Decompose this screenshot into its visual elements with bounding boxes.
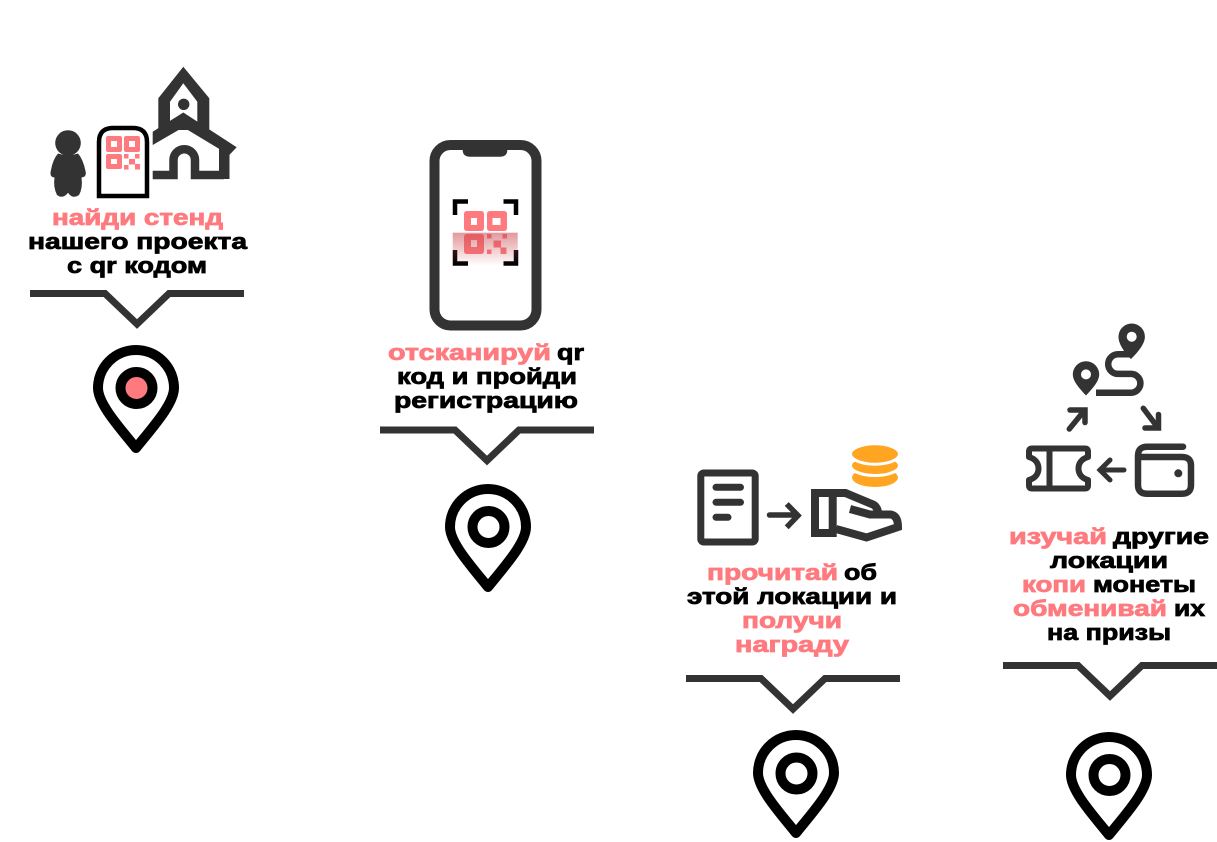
heading: step 1 text [28,205,248,278]
heading: step 4 text: локации [1050,548,1168,573]
heading: step 3 text: награду [735,632,850,657]
arrow: wallet to ticket [1100,460,1124,480]
heading: step 2 text: qr [557,340,584,365]
heading: step 3 text: получи [742,608,842,633]
heading: step 4 text: копи [1022,572,1086,597]
icon: document to reward [701,444,900,542]
icon: active map pin [98,350,174,448]
panel: step 1 find the stand [28,67,248,448]
icon: map pin [450,489,526,587]
heading: step 3 text: этой локации и [687,584,897,609]
panel: step 4 explore, collect, exchange [1003,324,1217,835]
arrow: document to hand [770,504,798,527]
heading: step 2 text: код и пройди [397,364,577,389]
icon: hand [815,493,898,538]
icon: church [153,67,237,179]
panel: step 3 read and get reward [686,444,900,833]
heading: step 3 text: прочитай [707,560,838,585]
heading: step 2 text: регистрацию [394,388,578,413]
heading: step 4 text: обменивай [1013,596,1167,621]
heading: step 4 text [1009,524,1209,645]
heading: step 1 text: найди стенд [52,205,223,230]
callout bracket: step 2 [380,430,594,460]
heading: step 4 text: другие [1113,524,1209,549]
icon: QR stand [99,128,147,196]
icon: document [701,473,755,542]
arrow: route to wallet [1143,408,1158,428]
scan frame [455,202,516,264]
heading: step 4 text: их [1174,596,1206,621]
arrow: ticket to route [1069,410,1085,429]
icon: person, QR stand and church [50,67,237,197]
callout bracket: step 1 [30,294,244,324]
QR code [464,211,507,254]
icon: map pin [1071,737,1147,835]
heading: step 2 text: отсканируй [388,340,551,365]
icon: phone scanning QR [434,145,536,326]
phone body [434,145,536,326]
heading: step 4 text: на призы [1047,620,1171,645]
phone notch [463,150,507,157]
callout bracket: step 4 [1003,666,1217,696]
heading: step 2 text [388,340,584,413]
heading: step 1 text: нашего проекта [28,229,248,254]
heading: step 1 text: с qr кодом [67,253,207,278]
panel: step 2 scan the code [380,145,594,587]
icon: person [50,130,86,197]
icon: coins [850,444,900,487]
icon: map pin [758,735,834,833]
scan beam [453,233,518,266]
heading: step 4 text: монеты [1093,572,1196,597]
heading: step 3 text: об [844,560,877,585]
icon: ticket [1029,448,1088,488]
icon: route, wallet and ticket cycle [1029,324,1191,494]
heading: step 4 text: изучай [1009,524,1107,549]
icon: wallet [1138,447,1191,494]
heading: step 3 text [687,560,897,657]
icon: route with pins [1073,324,1145,396]
callout bracket: step 3 [686,678,900,709]
